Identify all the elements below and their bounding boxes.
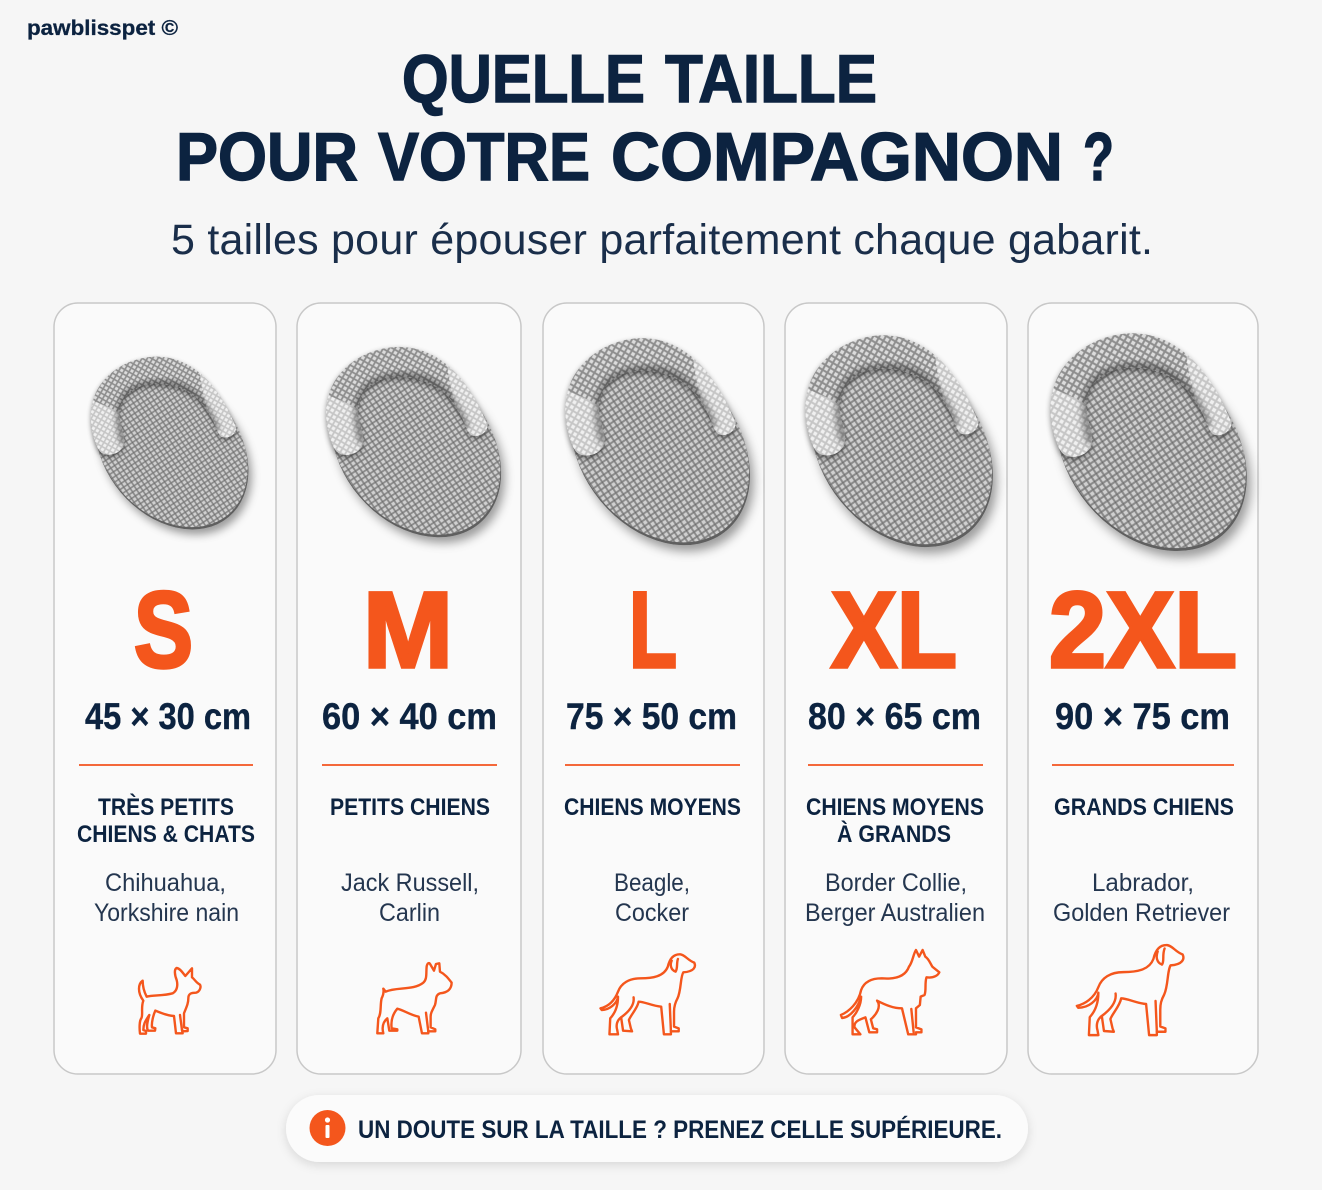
image: bed 2XL [1016, 309, 1286, 589]
image: bed M [296, 326, 536, 571]
callout: size advice [286, 1095, 1028, 1162]
category S [77, 793, 255, 848]
icon: french bulldog [377, 963, 452, 1033]
breeds S: Yorkshire nain [94, 899, 239, 927]
breeds L [614, 869, 690, 927]
breeds S: Chihuahua, [105, 869, 226, 897]
size letter L: L [629, 569, 677, 690]
title: ? [1083, 119, 1114, 195]
category S: TRÈS PETITS [98, 793, 234, 821]
subtitle: 5 tailles pour épouser parfaitement chaque gabarit. [171, 216, 1153, 264]
breeds S [94, 869, 239, 927]
breeds M [341, 869, 479, 927]
title: VOTRE [378, 119, 590, 195]
breeds 2XL: Golden Retriever [1053, 899, 1230, 927]
breeds M: Jack Russell, [341, 869, 479, 897]
panel: size 2XL [1016, 303, 1286, 1074]
icon: labrador [1077, 945, 1183, 1035]
size letter 2XL: 2XL [1049, 569, 1237, 690]
breeds L: Cocker [615, 899, 689, 927]
category S: CHIENS & CHATS [77, 821, 255, 848]
breeds XL: Border Collie, [825, 869, 967, 897]
image: bed S [63, 337, 280, 560]
breeds XL [805, 869, 985, 927]
dimensions L: 75 × 50 cm [566, 696, 737, 737]
breeds XL: Berger Australien [805, 899, 985, 927]
title: COMPAGNON [611, 119, 1063, 195]
dimensions S: 45 × 30 cm [85, 696, 251, 737]
callout text: UN DOUTE SUR LA TAILLE ? PRENEZ CELLE SUPÉRIEURE. [358, 1115, 1002, 1144]
breeds 2XL [1053, 869, 1230, 927]
dimensions 2XL: 90 × 75 cm [1055, 696, 1230, 737]
title [176, 41, 1114, 195]
image: bed L [533, 315, 787, 581]
category XL [806, 794, 984, 848]
category L: CHIENS MOYENS [564, 794, 741, 821]
title: POUR [176, 119, 358, 195]
image: bed XL [773, 312, 1030, 584]
brand mark: pawblisspet © [27, 17, 179, 40]
category XL: À GRANDS [837, 820, 951, 848]
icon: info [310, 1110, 346, 1146]
icon: beagle [601, 954, 695, 1034]
breeds M: Carlin [379, 899, 440, 927]
category XL: CHIENS MOYENS [806, 794, 984, 821]
title: QUELLE [402, 41, 645, 117]
panel: size S [54, 303, 280, 1074]
panel: size L [533, 303, 787, 1074]
breeds 2XL: Labrador, [1092, 869, 1194, 897]
panel: size XL [773, 303, 1030, 1074]
category M: PETITS CHIENS [330, 794, 490, 821]
dimensions M: 60 × 40 cm [322, 696, 497, 737]
panel: size M [296, 303, 536, 1074]
icon: chihuahua [139, 968, 200, 1034]
title: TAILLE [665, 41, 877, 117]
category 2XL: GRANDS CHIENS [1054, 794, 1234, 821]
breeds L: Beagle, [614, 869, 690, 897]
icon: shepherd dog [841, 950, 939, 1034]
dimensions XL: 80 × 65 cm [808, 696, 981, 737]
size letter S: S [134, 569, 193, 690]
size letter XL: XL [831, 569, 957, 690]
size letter M: M [363, 569, 453, 690]
